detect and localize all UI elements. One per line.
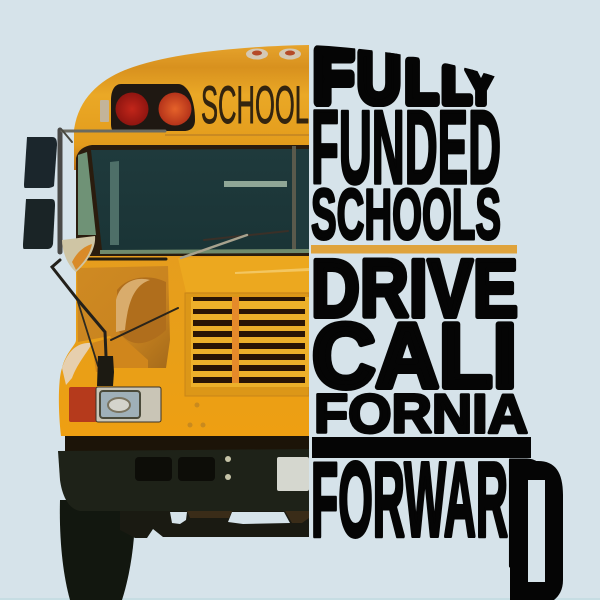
rivet strip: [165, 134, 309, 136]
roof markers: [246, 48, 301, 60]
clearance lamp: [100, 100, 109, 122]
bumper: [58, 449, 309, 511]
headlight bracket: [97, 356, 114, 386]
roof and cab: [74, 45, 309, 170]
large D: [505, 427, 563, 600]
FULLY: F: [314, 34, 354, 119]
black divider: [312, 437, 531, 458]
crossview mirror: [62, 236, 95, 272]
bumper gap: [65, 436, 309, 452]
under-bumper frame: [120, 508, 309, 538]
text: SCHOOL: [201, 76, 309, 135]
bus tire: [60, 500, 135, 600]
FULLY: L: [405, 48, 438, 116]
fender highlight: [62, 343, 92, 385]
license plate: [277, 457, 309, 491]
FULLY: [314, 45, 495, 107]
FULLY: L: [442, 57, 471, 115]
school bus photo: [23, 40, 312, 600]
wipers: [88, 231, 288, 259]
hood highlight: [117, 277, 166, 343]
mirror lower: [23, 199, 55, 249]
headlight assembly: [69, 387, 161, 422]
edge cleanup: [309, 40, 312, 540]
FORNIA: FORNIA: [314, 382, 528, 444]
body rivets: [188, 402, 206, 428]
FULLY: Y: [466, 59, 496, 115]
lower body: [59, 250, 309, 436]
FULLY: U: [357, 38, 401, 119]
gold divider: [311, 245, 517, 254]
headline: [311, 34, 563, 600]
warning lamps housing: [111, 84, 195, 131]
hood panel: [77, 266, 170, 368]
windshield: [76, 145, 309, 256]
mirror rod: [60, 130, 165, 252]
upper hood sheen: [178, 254, 309, 292]
mirror arms: [52, 260, 178, 366]
grille: [185, 293, 309, 396]
CALI: CALI: [312, 306, 517, 407]
DRIVE: DRIVE: [311, 244, 518, 334]
mirror upper: [24, 137, 57, 188]
